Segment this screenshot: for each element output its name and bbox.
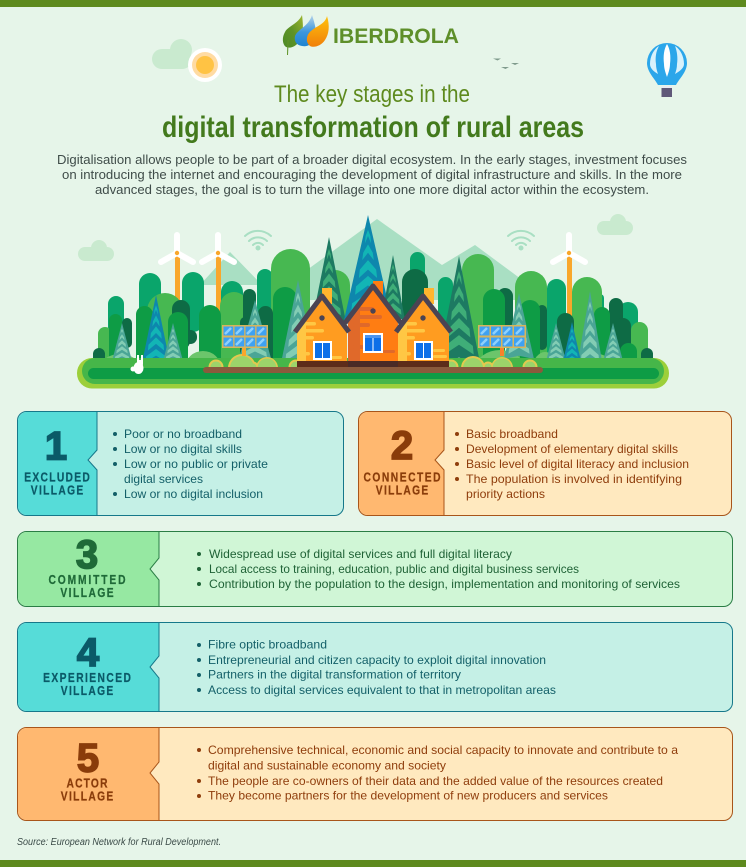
intro paragraph bbox=[57, 153, 687, 197]
bullet list: Basic level of digital literacy and inclusion bbox=[466, 457, 689, 471]
bullet list: priority actions bbox=[466, 487, 545, 501]
logo wordmark: IBERDROLA bbox=[333, 25, 459, 48]
number 4: 4 bbox=[77, 631, 100, 675]
bullet list bbox=[197, 743, 678, 802]
bullet list: Local access to training, education, public and digital business services bbox=[209, 562, 579, 576]
card 5: actor village bbox=[18, 728, 732, 820]
title bbox=[162, 81, 584, 144]
centre house bbox=[344, 286, 401, 362]
wind turbines bbox=[161, 235, 585, 326]
clouds bbox=[78, 214, 633, 261]
bullet list: The people are co-owners of their data and the added value of the resources created bbox=[208, 774, 663, 788]
bullet list: They become partners for the development of new producers and services bbox=[208, 788, 608, 802]
title line 1: The key stages in the bbox=[274, 81, 470, 108]
intro paragraph: Digitalisation allows people to be part of a broader digital ecosystem. In the early stages, investment focuses bbox=[57, 153, 687, 167]
label bbox=[43, 672, 131, 698]
number 1: 1 bbox=[45, 424, 67, 468]
bullet list: Comprehensive technical, economic and social capacity to innovate and contribute to a bbox=[208, 743, 678, 757]
source note: Source: European Network for Rural Development. bbox=[17, 837, 221, 848]
bullet list: Access to digital services equivalent to that in metropolitan areas bbox=[208, 683, 556, 697]
forest bushes bbox=[93, 215, 653, 358]
label: VILLAGE bbox=[31, 485, 84, 498]
bullet list: Widespread use of digital services and full digital literacy bbox=[209, 547, 512, 561]
hot air balloon bbox=[647, 43, 687, 97]
bullet list bbox=[113, 427, 268, 501]
pine trees bbox=[282, 280, 305, 358]
bullet list: Contribution by the population to the design, implementation and monitoring of services bbox=[209, 577, 680, 591]
right house bbox=[396, 296, 451, 362]
round shrubs bbox=[208, 354, 538, 367]
number 2: 2 bbox=[391, 424, 413, 468]
label: EXPERIENCED bbox=[43, 672, 131, 685]
label: VILLAGE bbox=[61, 791, 114, 804]
label: EXCLUDED bbox=[24, 472, 90, 485]
number 3: 3 bbox=[76, 533, 98, 577]
bullet list: Partners in the digital transformation of territory bbox=[208, 668, 461, 682]
label bbox=[363, 472, 441, 498]
white rabbit bbox=[130, 355, 144, 374]
house foundations bbox=[297, 361, 449, 367]
houses bbox=[295, 281, 451, 367]
label: ACTOR bbox=[66, 778, 108, 791]
label: VILLAGE bbox=[61, 685, 114, 698]
dirt path bbox=[203, 367, 543, 373]
bullet list: Development of elementary digital skills bbox=[466, 442, 678, 456]
label bbox=[48, 574, 126, 600]
title line 2: digital transformation of rural areas bbox=[162, 111, 584, 144]
bullet list: Poor or no broadband bbox=[124, 427, 242, 441]
intro paragraph: advanced stages, the goal is to turn the village into one more digital actor within the ecosystem. bbox=[95, 183, 649, 197]
bullet list: Basic broadband bbox=[466, 427, 558, 441]
label bbox=[61, 778, 114, 804]
bullet list bbox=[455, 427, 689, 501]
bottom bar bbox=[0, 860, 746, 867]
left house bbox=[295, 296, 349, 362]
bullet list: Low or no digital skills bbox=[124, 442, 242, 456]
top bar bbox=[0, 0, 746, 7]
Iberdrola logo bbox=[283, 15, 459, 55]
label bbox=[24, 472, 90, 498]
chimneys bbox=[322, 281, 434, 304]
card 1: excluded village bbox=[18, 412, 344, 516]
label: COMMITTED bbox=[48, 574, 126, 587]
ground bbox=[77, 358, 669, 388]
bullet list: Low or no digital inclusion bbox=[124, 487, 263, 501]
intro paragraph: on introducing the internet and encouraging the development of digital infrastructure and skills. In the more bbox=[62, 168, 682, 182]
bullet list: Entrepreneurial and citizen capacity to exploit digital innovation bbox=[208, 653, 546, 667]
bullet list bbox=[197, 638, 556, 697]
card 2: connected village bbox=[358, 412, 732, 516]
wifi signals bbox=[245, 231, 534, 250]
village illustration bbox=[77, 214, 669, 403]
bullet list bbox=[197, 547, 680, 591]
birds bbox=[493, 58, 519, 69]
card 3: committed village bbox=[18, 532, 732, 606]
label: VILLAGE bbox=[60, 587, 114, 600]
label: CONNECTED bbox=[363, 472, 441, 485]
mountains bbox=[200, 219, 525, 300]
solar panels bbox=[222, 325, 526, 356]
bullet list: digital services bbox=[124, 472, 203, 486]
bullet list: The population is involved in identifying bbox=[466, 472, 682, 486]
number 5: 5 bbox=[77, 736, 99, 780]
bullet list: Low or no public or private bbox=[124, 457, 268, 471]
cloud and sun bbox=[152, 39, 222, 82]
label: VILLAGE bbox=[376, 485, 429, 498]
card 4: experienced village bbox=[18, 622, 732, 712]
bullet list: Fibre optic broadband bbox=[208, 638, 327, 652]
bullet list: digital and sustainable economy and society bbox=[208, 758, 446, 772]
